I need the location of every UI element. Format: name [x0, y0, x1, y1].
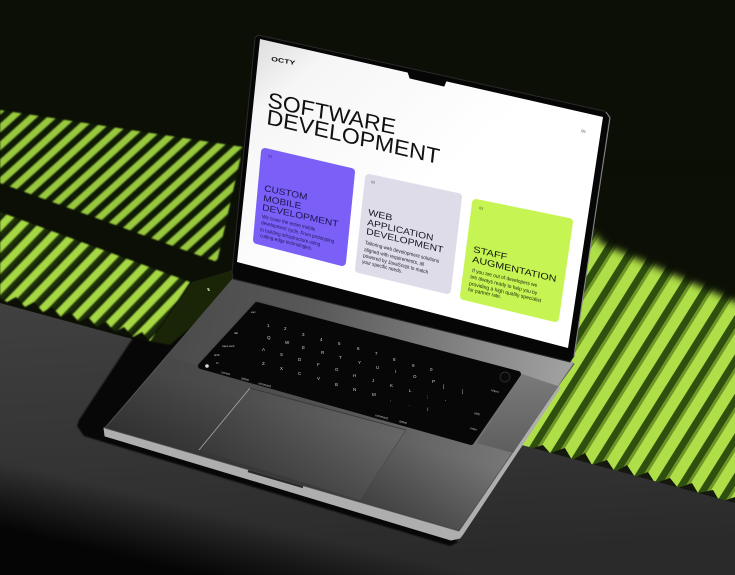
card: staff augmentation: 03 [479, 206, 483, 211]
key legends: U [376, 365, 379, 370]
key legends: L [409, 388, 412, 393]
key legends: tab [234, 331, 239, 335]
pleated green panel: upper left [0, 109, 244, 262]
key legends: F [317, 362, 320, 367]
card: custom mobile development: We cover the entire mobile [262, 214, 315, 233]
laptop shadow [77, 285, 458, 546]
key legends: 7 [375, 351, 378, 356]
key legends: Y [358, 360, 361, 365]
key legends: V [317, 376, 320, 381]
page number: 06 [581, 128, 587, 134]
key legends: J [372, 378, 374, 383]
globe key [205, 364, 209, 368]
key legends: B [335, 382, 338, 387]
card: staff augmentation: providing a high quality specialist [469, 281, 542, 304]
card: web application development: 02 [371, 180, 375, 185]
key legends: Z [262, 361, 265, 366]
card: web application development: powered by JavaScript to match [363, 253, 428, 276]
key legends: W [285, 340, 290, 345]
lid [232, 35, 610, 362]
card: staff augmentation: are always ready to help you by [470, 274, 538, 297]
trackpad [199, 388, 406, 500]
card: web application development [359, 178, 458, 290]
olive wedge beside laptop [150, 270, 233, 356]
key legends: 2 [284, 326, 287, 331]
card: custom mobile development: CUSTOM [264, 183, 308, 202]
card: web application development: your specific needs. [362, 259, 402, 275]
card: custom mobile development: development cycle. From prototyping [261, 220, 334, 245]
key legends: K [390, 383, 393, 388]
card: custom mobile development [257, 152, 351, 262]
key legends: 9 [412, 363, 415, 368]
card: staff augmentation: AUGMENTATION [472, 254, 557, 284]
key legends: 3 [302, 332, 305, 337]
key legends: shift [214, 353, 220, 357]
right speaker strip [477, 375, 558, 453]
key legends: I [395, 369, 396, 374]
floor [0, 303, 735, 575]
key legends: D [298, 357, 302, 362]
key legends: esc [251, 310, 256, 314]
key legends: [ [443, 384, 445, 389]
key legends: command [258, 381, 272, 388]
display [237, 39, 603, 348]
key legends: 1 [267, 323, 270, 328]
laptop deck [105, 279, 574, 531]
card: custom mobile development: 01 [268, 154, 272, 159]
keyboard [201, 305, 518, 442]
logo: OCTY [271, 57, 295, 67]
key legends: , [390, 397, 391, 402]
key legends: 6 [357, 346, 360, 351]
key legends: ' [445, 399, 446, 404]
key legends: 8 [393, 357, 396, 362]
card: custom mobile development: DEVELOPMENT [262, 202, 339, 229]
pleated green panel: lower left [0, 212, 191, 342]
card: custom mobile development: cutting-edge technologies. [260, 233, 312, 252]
key legends: ; [427, 394, 428, 399]
key legends: caps lock [222, 344, 235, 348]
lid bezel [232, 35, 610, 362]
laptop [104, 35, 610, 540]
hinge strip [166, 279, 574, 386]
card: staff augmentation: for partner rate. [468, 287, 501, 300]
laptop base rim [104, 384, 560, 540]
key legends: control [221, 370, 231, 376]
card: staff augmentation [464, 203, 569, 318]
key legends: H [353, 373, 356, 378]
key legends: enter [470, 426, 477, 432]
card: web application development: WEB [368, 207, 393, 223]
key legends: 5 [338, 341, 341, 346]
key legends: return [491, 388, 500, 394]
key legends: / [427, 407, 429, 412]
key legends: fn [216, 361, 219, 365]
front notch [248, 471, 303, 487]
card: web application development: aligned with requirements, all [364, 247, 424, 268]
pleated green panel: right [522, 227, 735, 502]
key legends: T [339, 355, 342, 360]
key legends: S [280, 352, 283, 357]
key legends: G [335, 367, 339, 372]
key legends: O [413, 374, 417, 379]
card: staff augmentation: STAFF [473, 244, 509, 262]
key legends: 4 [320, 337, 323, 342]
key legends: P [432, 379, 435, 384]
key legends: X [280, 366, 283, 371]
key legends: option [241, 376, 250, 382]
key legends: shift [474, 411, 480, 416]
card: web application development: APPLICATION [367, 217, 434, 243]
key legends: command [375, 413, 389, 420]
key legends: C [298, 371, 302, 376]
key legends: Q [267, 335, 271, 340]
key legends: R [321, 350, 325, 355]
lid edge highlight [574, 112, 610, 356]
deck front shading [105, 279, 574, 531]
key legends: ] [462, 389, 463, 394]
touch id button [500, 372, 510, 382]
key legends: N [353, 387, 356, 392]
key legends: option [399, 419, 408, 425]
key legends: A [262, 347, 265, 352]
key legends: . [409, 402, 410, 407]
headline: SOFTWARE [266, 87, 397, 139]
card: custom mobile development: to building infrastructure using [260, 227, 320, 248]
key legends: E [302, 345, 305, 350]
card: custom mobile development: MOBILE [263, 193, 302, 211]
key legends: 0 [430, 367, 433, 372]
key legends: M [372, 392, 376, 397]
headline: DEVELOPMENT [265, 104, 441, 169]
camera notch [408, 72, 446, 86]
card: web application development: DEVELOPMENT [366, 226, 444, 255]
key legends [214, 310, 500, 432]
card: web application development: Tailoring web development solutions [365, 240, 440, 265]
card: staff augmentation: If you are out of developers we [472, 268, 537, 289]
